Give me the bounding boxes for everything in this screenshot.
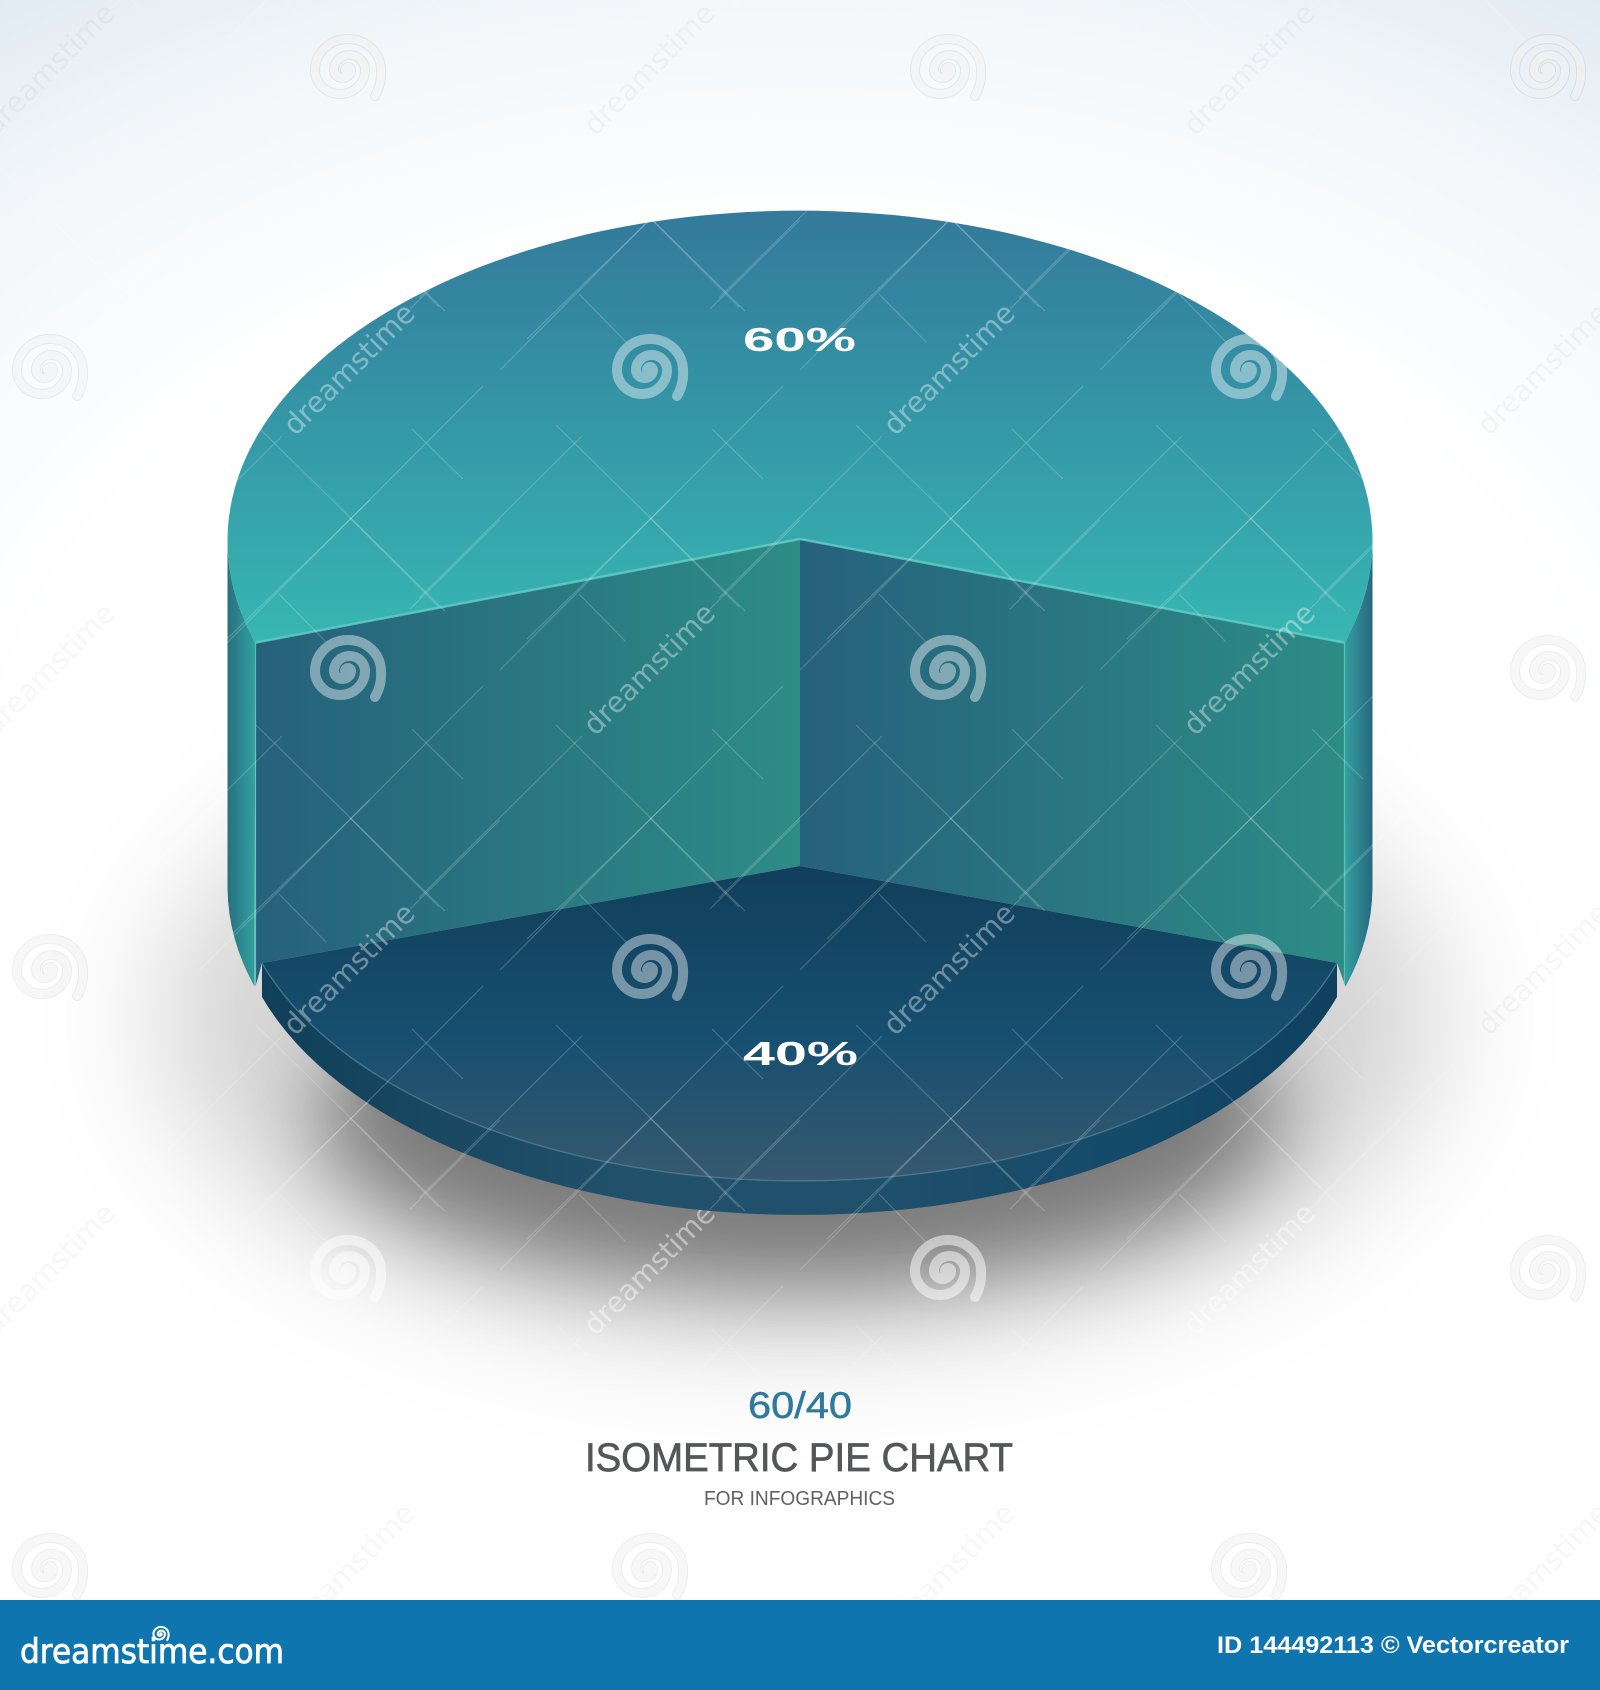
isometric pie chart — [166, 210, 1372, 1641]
wedge edge highlights — [256, 539, 1344, 984]
watermark marks on pie: dreamstime — [1176, 596, 1322, 742]
caption ratio: 60/40 — [748, 1385, 852, 1426]
watermark marks on pie: dreamstime — [576, 596, 722, 742]
watermark on background: dreamstime — [576, 1196, 722, 1342]
watermark marks on pie: dreamstime — [876, 896, 1022, 1042]
right inner wall — [800, 539, 1346, 986]
label: 40%: 40% — [743, 1035, 858, 1072]
watermark marks on pie: dreamstime — [876, 296, 1022, 442]
footer logo: dreamstime.com — [20, 1632, 284, 1672]
caption title: ISOMETRIC PIE CHART — [585, 1436, 1013, 1480]
left outer side strip — [227, 540, 256, 986]
left inner wall — [256, 539, 800, 986]
watermark marks on pie: dreamstime — [276, 896, 422, 1042]
background — [0, 0, 1600, 800]
disc rim highlight — [262, 963, 1337, 1181]
40% disc top surface — [262, 866, 1337, 1181]
watermark marks on pie — [276, 296, 1322, 1042]
watermark on background: dreamstime — [876, 1496, 1022, 1642]
watermark on background: dreamstime — [276, 1496, 422, 1642]
caption subtitle: FOR INFOGRAPHICS — [704, 1488, 895, 1510]
image id and credit: ID 144492113 © Vectorcreator — [1217, 1632, 1569, 1659]
watermark on background: dreamstime — [1176, 1196, 1322, 1342]
icon: footer spiral — [153, 1627, 169, 1640]
40% disc side edge — [262, 963, 1337, 1215]
caption — [585, 1385, 1013, 1510]
label: 60%: 60% — [743, 321, 856, 358]
drop shadow under pie — [160, 700, 1440, 1340]
watermark marks on pie: dreamstime — [276, 296, 422, 442]
footer bar — [0, 1600, 1600, 1690]
right outer side strip — [1344, 540, 1373, 986]
60% top surface — [227, 211, 1372, 643]
